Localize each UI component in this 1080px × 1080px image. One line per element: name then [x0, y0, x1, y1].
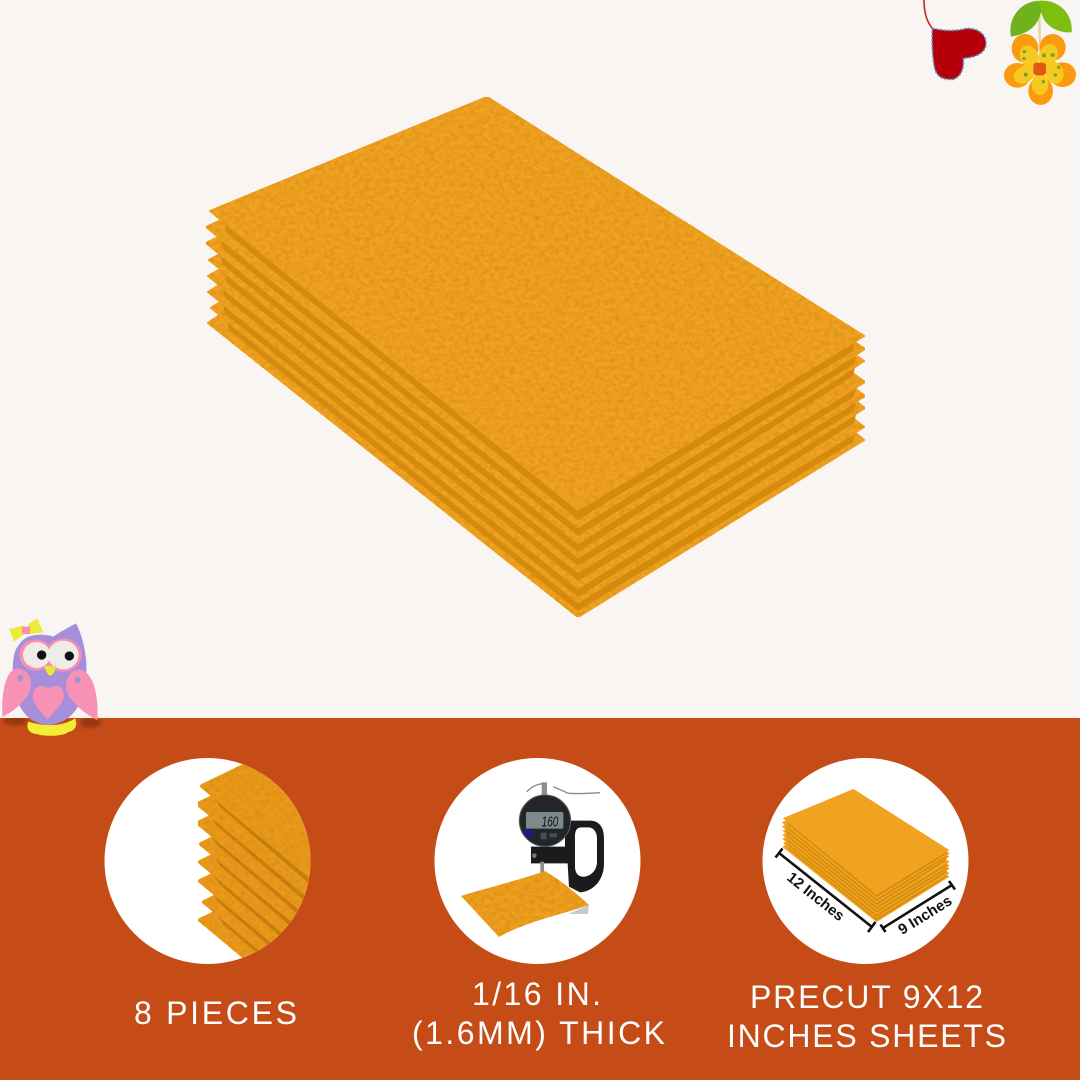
bottom band — [0, 718, 1080, 1080]
icon: felt heart ornament — [924, 0, 986, 79]
panel: sheet dimensions — [727, 758, 1006, 1054]
dimension line: 12 inches — [776, 848, 876, 932]
close-up of stacked sheet edges — [198, 764, 310, 958]
label: dimensions — [727, 979, 1006, 1054]
icon: felt flower ornament — [1004, 1, 1076, 105]
panel: thickness — [412, 758, 665, 1051]
label: thickness: 1/16 IN. — [472, 976, 601, 1012]
main felt sheet stack — [206, 97, 865, 617]
circle: thickness background — [434, 758, 640, 964]
dimension line: 9 inches: 9 Inches — [895, 892, 955, 939]
felt curl shadow — [568, 905, 589, 914]
label: 8 pieces: 8 PIECES — [134, 995, 297, 1031]
icon: digital thickness gauge: 160 — [542, 815, 559, 831]
label: dimensions: PRECUT 9X12 — [750, 979, 983, 1015]
circle: 8 pieces background — [104, 758, 310, 964]
circle: dimensions background — [762, 758, 968, 964]
dimension line: 12 inches: 12 Inches — [783, 869, 848, 925]
dimension line: 9 inches — [880, 881, 955, 939]
panel: 8 pieces — [104, 758, 310, 1024]
label: thickness — [412, 976, 665, 1051]
label: dimensions: INCHES SHEETS — [727, 1018, 1006, 1054]
icon: digital thickness gauge — [519, 782, 604, 892]
felt sheet under gauge — [461, 871, 589, 937]
label: thickness: (1.6MM) THICK — [412, 1015, 665, 1051]
small felt stack — [782, 789, 949, 922]
icon: felt owl — [2, 618, 101, 736]
